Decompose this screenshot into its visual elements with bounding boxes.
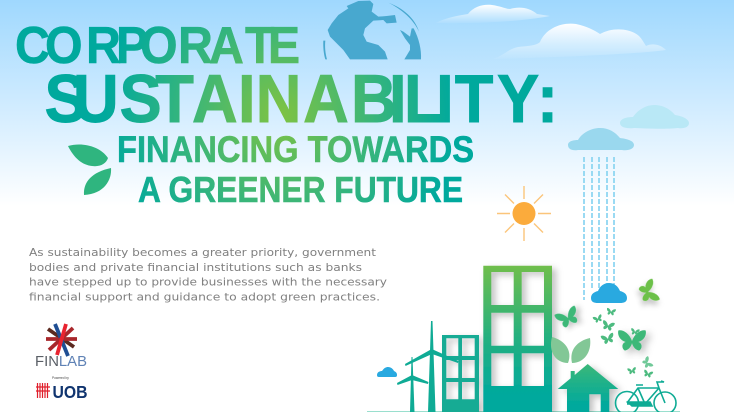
cloud: rain: [568, 128, 634, 150]
subtitle line: A Greener Future: A GREENER FUTURE: [138, 169, 463, 210]
large building: [483, 266, 552, 412]
intro paragraph: As sustainability becomes a greater priority, government: [29, 247, 376, 259]
icon: globe: [323, 1, 421, 59]
subtitle line: Financing Towards: FINANCING TOWARDS: [117, 129, 474, 170]
bicycle: [616, 381, 676, 412]
cloud: blue under rain: [591, 283, 627, 303]
intro paragraph: financial support and guidance to adopt green practices.: [29, 292, 380, 304]
title: [15, 16, 558, 210]
intro paragraph: have stepped up to provide businesses with the necessary: [29, 276, 387, 288]
small building: [442, 335, 479, 412]
butterfly: left: [554, 305, 581, 330]
icon: sun: [497, 186, 551, 241]
sky background: [0, 0, 734, 206]
wind turbines: [397, 321, 458, 412]
logo: FinLab: [35, 324, 87, 370]
icon: leaves: [68, 144, 111, 195]
butterfly: lime: [637, 278, 660, 305]
cloud: small blue: [377, 367, 397, 377]
ground line: [367, 410, 680, 412]
house: [558, 364, 618, 412]
cloud: large: [493, 24, 666, 59]
title line: Corporate: CORPORATE: [15, 16, 300, 74]
logo mark: [46, 324, 77, 356]
powered by caption: Powered by: [52, 376, 69, 380]
cloud: top: [436, 5, 550, 23]
UOB wordmark: UOB: [52, 382, 88, 402]
butterfly: large: [618, 330, 646, 350]
cloud: pale: [620, 105, 689, 129]
butterflies: [554, 278, 660, 378]
logo: UOB: [36, 382, 88, 402]
title line: Sustainability: SUSTAINABILITY:: [44, 61, 558, 136]
rain lines: [584, 157, 614, 300]
intro paragraph: [29, 247, 387, 304]
FinLab wordmark: FINLAB: [35, 354, 87, 370]
icon: leaves above house: [551, 337, 590, 363]
butterfly swarm: [593, 308, 653, 378]
intro paragraph: bodies and private financial institutions such as banks: [29, 262, 362, 274]
UOB mark: [36, 383, 50, 398]
